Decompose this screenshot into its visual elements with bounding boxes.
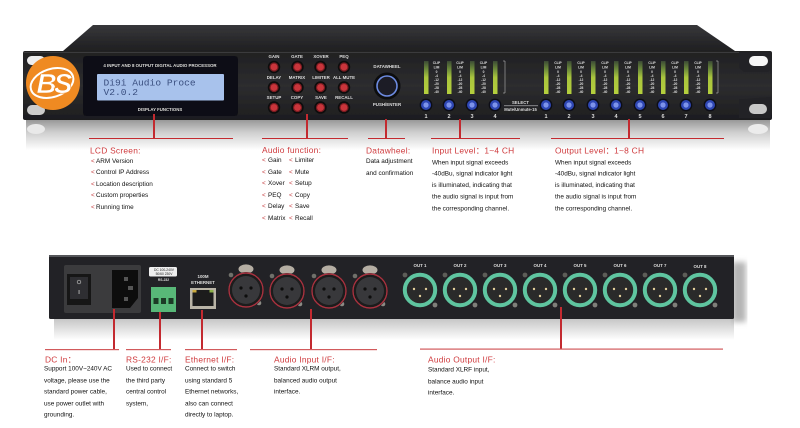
description: the third party [126, 378, 166, 384]
description: standard power cable, [44, 388, 107, 396]
rs-232 terminal: 50/60 230V [156, 272, 173, 276]
ethernet port: ETHERNET [191, 280, 215, 285]
output level meters: -40 [650, 90, 655, 94]
output level meters: 0 [627, 70, 629, 74]
description: Standard XLRF input, [428, 366, 490, 374]
function list: < [289, 192, 293, 199]
callout: Audio Output [428, 354, 496, 396]
input level meters: CLIP [433, 61, 441, 65]
front panel shadow reflection [26, 118, 770, 150]
xlr output connectors: OUT 4 [534, 263, 547, 268]
description: Support 100V~240V AC [44, 366, 112, 372]
feature list: Running time [96, 204, 134, 211]
description: the audio signal is input from [432, 194, 513, 200]
output level meters: -12 [579, 78, 584, 82]
input level meters: -40 [481, 90, 486, 94]
output level meters: 0 [697, 70, 699, 74]
chassis [49, 255, 734, 319]
input level meters: -4 [435, 74, 438, 78]
function list: < [262, 215, 266, 222]
function list: < [262, 157, 266, 164]
input level meters: CLIP [480, 61, 488, 65]
channel select buttons: 1 [424, 114, 428, 120]
rear panel device [49, 255, 734, 319]
xlr output connectors: OUT 1 [414, 263, 427, 268]
audio function buttons: DELAY [267, 75, 281, 80]
output level meters: -28 [696, 86, 701, 90]
iec power inlet [112, 270, 138, 308]
feature list: < [91, 192, 95, 199]
output level meters: -4 [580, 74, 583, 78]
feature list: Location description [96, 181, 153, 188]
output level meters: -12 [696, 78, 701, 82]
audio function buttons: LIMITER [312, 75, 331, 80]
output level meters: -28 [603, 86, 608, 90]
description: Standard XLRM output, [274, 366, 341, 372]
front panel device [23, 25, 772, 120]
output level meters: -4 [627, 74, 630, 78]
output level meters: -20 [673, 82, 678, 86]
output level meters: LIM [672, 66, 678, 70]
input level meters: LIM [457, 66, 463, 70]
description: -40dBu, signal indicator light [555, 170, 636, 178]
output level meters: -40 [579, 90, 584, 94]
input level meters: LIM [481, 66, 487, 70]
audio function buttons: XOVER [313, 54, 330, 59]
output level meters: -28 [579, 86, 584, 90]
rs-232 terminal [149, 267, 177, 312]
input level meters: -28 [434, 86, 439, 90]
input level meters: -20 [458, 82, 463, 86]
heading: RS-232 I/F: [126, 354, 172, 364]
rs-232 terminal: RS-232 [158, 278, 169, 282]
heading: DC In： [45, 354, 76, 364]
channel select buttons: 2 [567, 114, 571, 120]
description: Connect to switch [185, 366, 236, 372]
audio function buttons: SAVE [315, 95, 327, 100]
output level meters: 0 [557, 70, 559, 74]
callout connectors top [89, 114, 724, 139]
chassis top [63, 25, 735, 51]
audio function buttons: ALL MUTE [333, 75, 355, 80]
input level meters: -12 [481, 78, 486, 82]
display functions label: DISPLAY FUNCTIONS [138, 107, 182, 112]
description: When input signal exceeds [555, 160, 631, 166]
input level meters: -20 [434, 82, 439, 86]
lcd screen: Di9i Audio Proce [104, 78, 196, 88]
output level meters: CLIP [577, 61, 586, 65]
output level meters: -28 [673, 86, 678, 90]
function list: < [289, 215, 293, 222]
output level meters: -4 [651, 74, 654, 78]
feature list: < [91, 181, 95, 188]
output level meters: CLIP [694, 61, 703, 65]
heading: Datawheel: [366, 146, 410, 156]
callout: DC In [44, 354, 112, 418]
function list: < [262, 180, 266, 187]
output level meters: LIM [602, 66, 608, 70]
callout: Audio function [262, 145, 321, 222]
output level meters: -40 [696, 90, 701, 94]
input level meters: -40 [434, 90, 439, 94]
rear panel shadow [54, 262, 746, 340]
description: and confirmation [366, 170, 414, 177]
model title: 4 INPUT AND 8 OUTPUT DIGITAL AUDIO PROCESSOR [103, 63, 217, 68]
datawheel knob: DATAWHEEL [373, 64, 401, 69]
output level meters: -40 [603, 90, 608, 94]
input level meters: LIM [434, 66, 440, 70]
xlr output connectors: OUT 8 [694, 264, 707, 269]
description: interface. [274, 388, 301, 396]
output level meters: -20 [556, 82, 561, 86]
logo badge [26, 56, 80, 110]
description: use power outlet with [44, 400, 104, 408]
description: voltage, please use the [44, 378, 110, 384]
callout: Output Level [555, 146, 644, 212]
channel select buttons: SELECT [512, 100, 529, 105]
feature list: Control IP Address [96, 169, 149, 176]
channel select buttons [420, 99, 716, 120]
description: central control [126, 388, 166, 396]
xlr output connectors: OUT 7 [654, 263, 667, 268]
xlr input connectors [228, 264, 388, 309]
front face [23, 51, 772, 120]
audio function buttons: GATE [291, 54, 303, 59]
power module [64, 265, 141, 313]
description: balanced audio output [274, 378, 337, 384]
channel select buttons: 3 [470, 114, 474, 120]
callout: Input Level [432, 146, 514, 212]
description: system, [126, 400, 148, 408]
heading: Output Level：1~8 CH [555, 146, 644, 156]
output level meters: 0 [604, 70, 606, 74]
output level meters: -20 [626, 82, 631, 86]
feature list: Custom properties [96, 192, 148, 199]
output level meters: -20 [579, 82, 584, 86]
xlr output connectors: OUT 3 [494, 263, 507, 268]
description: is illuminated, indicating that [555, 182, 635, 189]
xlr output connectors: OUT 5 [574, 263, 587, 268]
feature list: < [91, 158, 95, 165]
feature list: < [91, 169, 95, 176]
input level meters: -28 [458, 86, 463, 90]
description: Data adjustment [366, 158, 413, 165]
description: Ethernet networks, [185, 388, 239, 396]
output level meters: -28 [556, 86, 561, 90]
output level meters: -40 [626, 90, 631, 94]
description: is illuminated, indicating that [432, 182, 512, 189]
heading: Ethernet I/F: [185, 354, 234, 364]
heading: LCD Screen: [90, 146, 141, 156]
output level meters: -4 [557, 74, 560, 78]
channel select buttons: 3 [591, 114, 595, 120]
function list: Limiter [295, 157, 315, 164]
output level meters: -20 [650, 82, 655, 86]
function list: Xover [268, 180, 286, 187]
function list: < [262, 203, 266, 210]
description: -40dBu, signal indicator light [432, 170, 513, 178]
input level meters: -40 [458, 90, 463, 94]
channel select buttons: 4 [614, 114, 618, 120]
description: When input signal exceeds [432, 160, 508, 166]
output level meters: -12 [673, 78, 678, 82]
output level meters: -12 [603, 78, 608, 82]
channel select buttons: Mute/Unmute-15 [504, 107, 537, 112]
description: grounding. [44, 412, 74, 418]
datawheel knob: PUSH/ENTER [373, 102, 402, 107]
function list: Gate [268, 169, 282, 176]
output level meters: LIM [695, 66, 701, 70]
output level meters: LIM [649, 66, 655, 70]
description: using standard 5 [185, 378, 233, 384]
channel select buttons: 1 [544, 114, 548, 120]
function list: Delay [268, 203, 285, 210]
input level meters: -12 [434, 78, 439, 82]
input level meters: 0 [459, 70, 461, 74]
output level meters: CLIP [554, 61, 563, 65]
description: balance audio input [428, 378, 484, 386]
output level meters: -12 [556, 78, 561, 82]
output level meters: -20 [603, 82, 608, 86]
input level meters: -12 [458, 78, 463, 82]
output level meters: -28 [626, 86, 631, 90]
function list: Setup [295, 180, 312, 187]
output level meters: LIM [555, 66, 561, 70]
input level meters: 0 [436, 70, 438, 74]
description: interface. [428, 390, 455, 396]
description: Used to connect [126, 366, 172, 372]
ethernet port: 100M [198, 274, 209, 279]
description: directly to laptop. [185, 412, 234, 418]
heading: Input Level：1~4 CH [432, 146, 514, 156]
function list: Matrix [268, 215, 286, 222]
function list: PEQ [268, 192, 282, 199]
output level meters: CLIP [648, 61, 657, 65]
channel select buttons: 7 [684, 114, 688, 120]
ethernet port [190, 274, 216, 309]
callout: RS-232 [126, 354, 172, 408]
output level meters: 0 [674, 70, 676, 74]
channel select buttons: 2 [447, 114, 451, 120]
feature list: < [91, 204, 95, 211]
function list: < [262, 192, 266, 199]
input level meters: -28 [481, 86, 486, 90]
output level meters: CLIP [624, 61, 633, 65]
description: the corresponding channel. [555, 206, 632, 212]
channel select buttons: 5 [638, 114, 642, 120]
output level meters: LIM [625, 66, 631, 70]
audio function buttons: SETUP [267, 95, 281, 100]
xlr output connectors: OUT 6 [614, 263, 627, 268]
audio function buttons: PEQ [339, 54, 349, 59]
callout connectors bottom [45, 307, 723, 350]
channel select buttons: 4 [493, 114, 497, 120]
output level meters: CLIP [601, 61, 610, 65]
heading: Audio Output I/F: [428, 354, 496, 364]
function list: Save [295, 203, 310, 210]
datawheel knob [373, 64, 402, 107]
heading: Audio function: [262, 145, 321, 155]
output level meters: -28 [650, 86, 655, 90]
function list: < [289, 169, 293, 176]
audio function buttons: GAIN [269, 54, 279, 59]
audio function buttons: RECALL [335, 95, 353, 100]
channel select buttons: 8 [708, 114, 712, 120]
callout: Ethernet [185, 354, 239, 418]
output level meters: 0 [651, 70, 653, 74]
callout: LCD screen [90, 146, 155, 211]
output level meters: -40 [556, 90, 561, 94]
rs-232 terminal: DC 100-240V [154, 268, 175, 272]
heading: Audio Input I/F: [274, 354, 335, 364]
callout: Audio Input [274, 354, 341, 396]
output level meters: 0 [580, 70, 582, 74]
input level meters: CLIP [456, 61, 465, 65]
xlr output connectors: OUT 2 [454, 263, 467, 268]
function list: < [289, 157, 293, 164]
output level meters: LIM [578, 66, 584, 70]
channel select buttons: 6 [661, 114, 665, 120]
function list: Copy [295, 192, 311, 199]
output level meters [544, 61, 718, 94]
output level meters: -12 [626, 78, 631, 82]
function list: < [262, 169, 266, 176]
output level meters: -20 [696, 82, 701, 86]
lcd bezel [83, 56, 238, 116]
xlr output connectors [403, 263, 717, 307]
description: the audio signal is input from [555, 194, 636, 200]
audio function buttons: MATRIX [289, 75, 305, 80]
input level meters: 0 [483, 70, 485, 74]
lcd screen [97, 74, 224, 100]
function list: Recall [295, 215, 313, 222]
function list: Mute [295, 169, 310, 176]
lcd screen: V2.0.2 [104, 87, 138, 98]
callout: Datawheel [366, 146, 414, 177]
input level meters [424, 61, 505, 94]
audio function buttons [267, 54, 355, 114]
function list: Gain [268, 157, 282, 164]
description: also can connect [185, 400, 233, 408]
output level meters: -4 [604, 74, 607, 78]
input level meters: -20 [481, 82, 486, 86]
function list: < [289, 203, 293, 210]
output level meters: -12 [650, 78, 655, 82]
feature list: ARM Version [96, 158, 134, 165]
description: the corresponding channel. [432, 206, 509, 212]
output level meters: -4 [674, 74, 677, 78]
output level meters: -40 [673, 90, 678, 94]
output level meters: -4 [697, 74, 700, 78]
right rack ear [739, 52, 771, 118]
input level meters: -4 [459, 74, 462, 78]
output level meters: CLIP [671, 61, 680, 65]
audio function buttons: COPY [291, 95, 303, 100]
left rack holes [27, 56, 45, 115]
rocker switch [67, 274, 91, 305]
function list: < [289, 180, 293, 187]
logo badge: BS [37, 68, 73, 99]
input level meters: -4 [482, 74, 485, 78]
